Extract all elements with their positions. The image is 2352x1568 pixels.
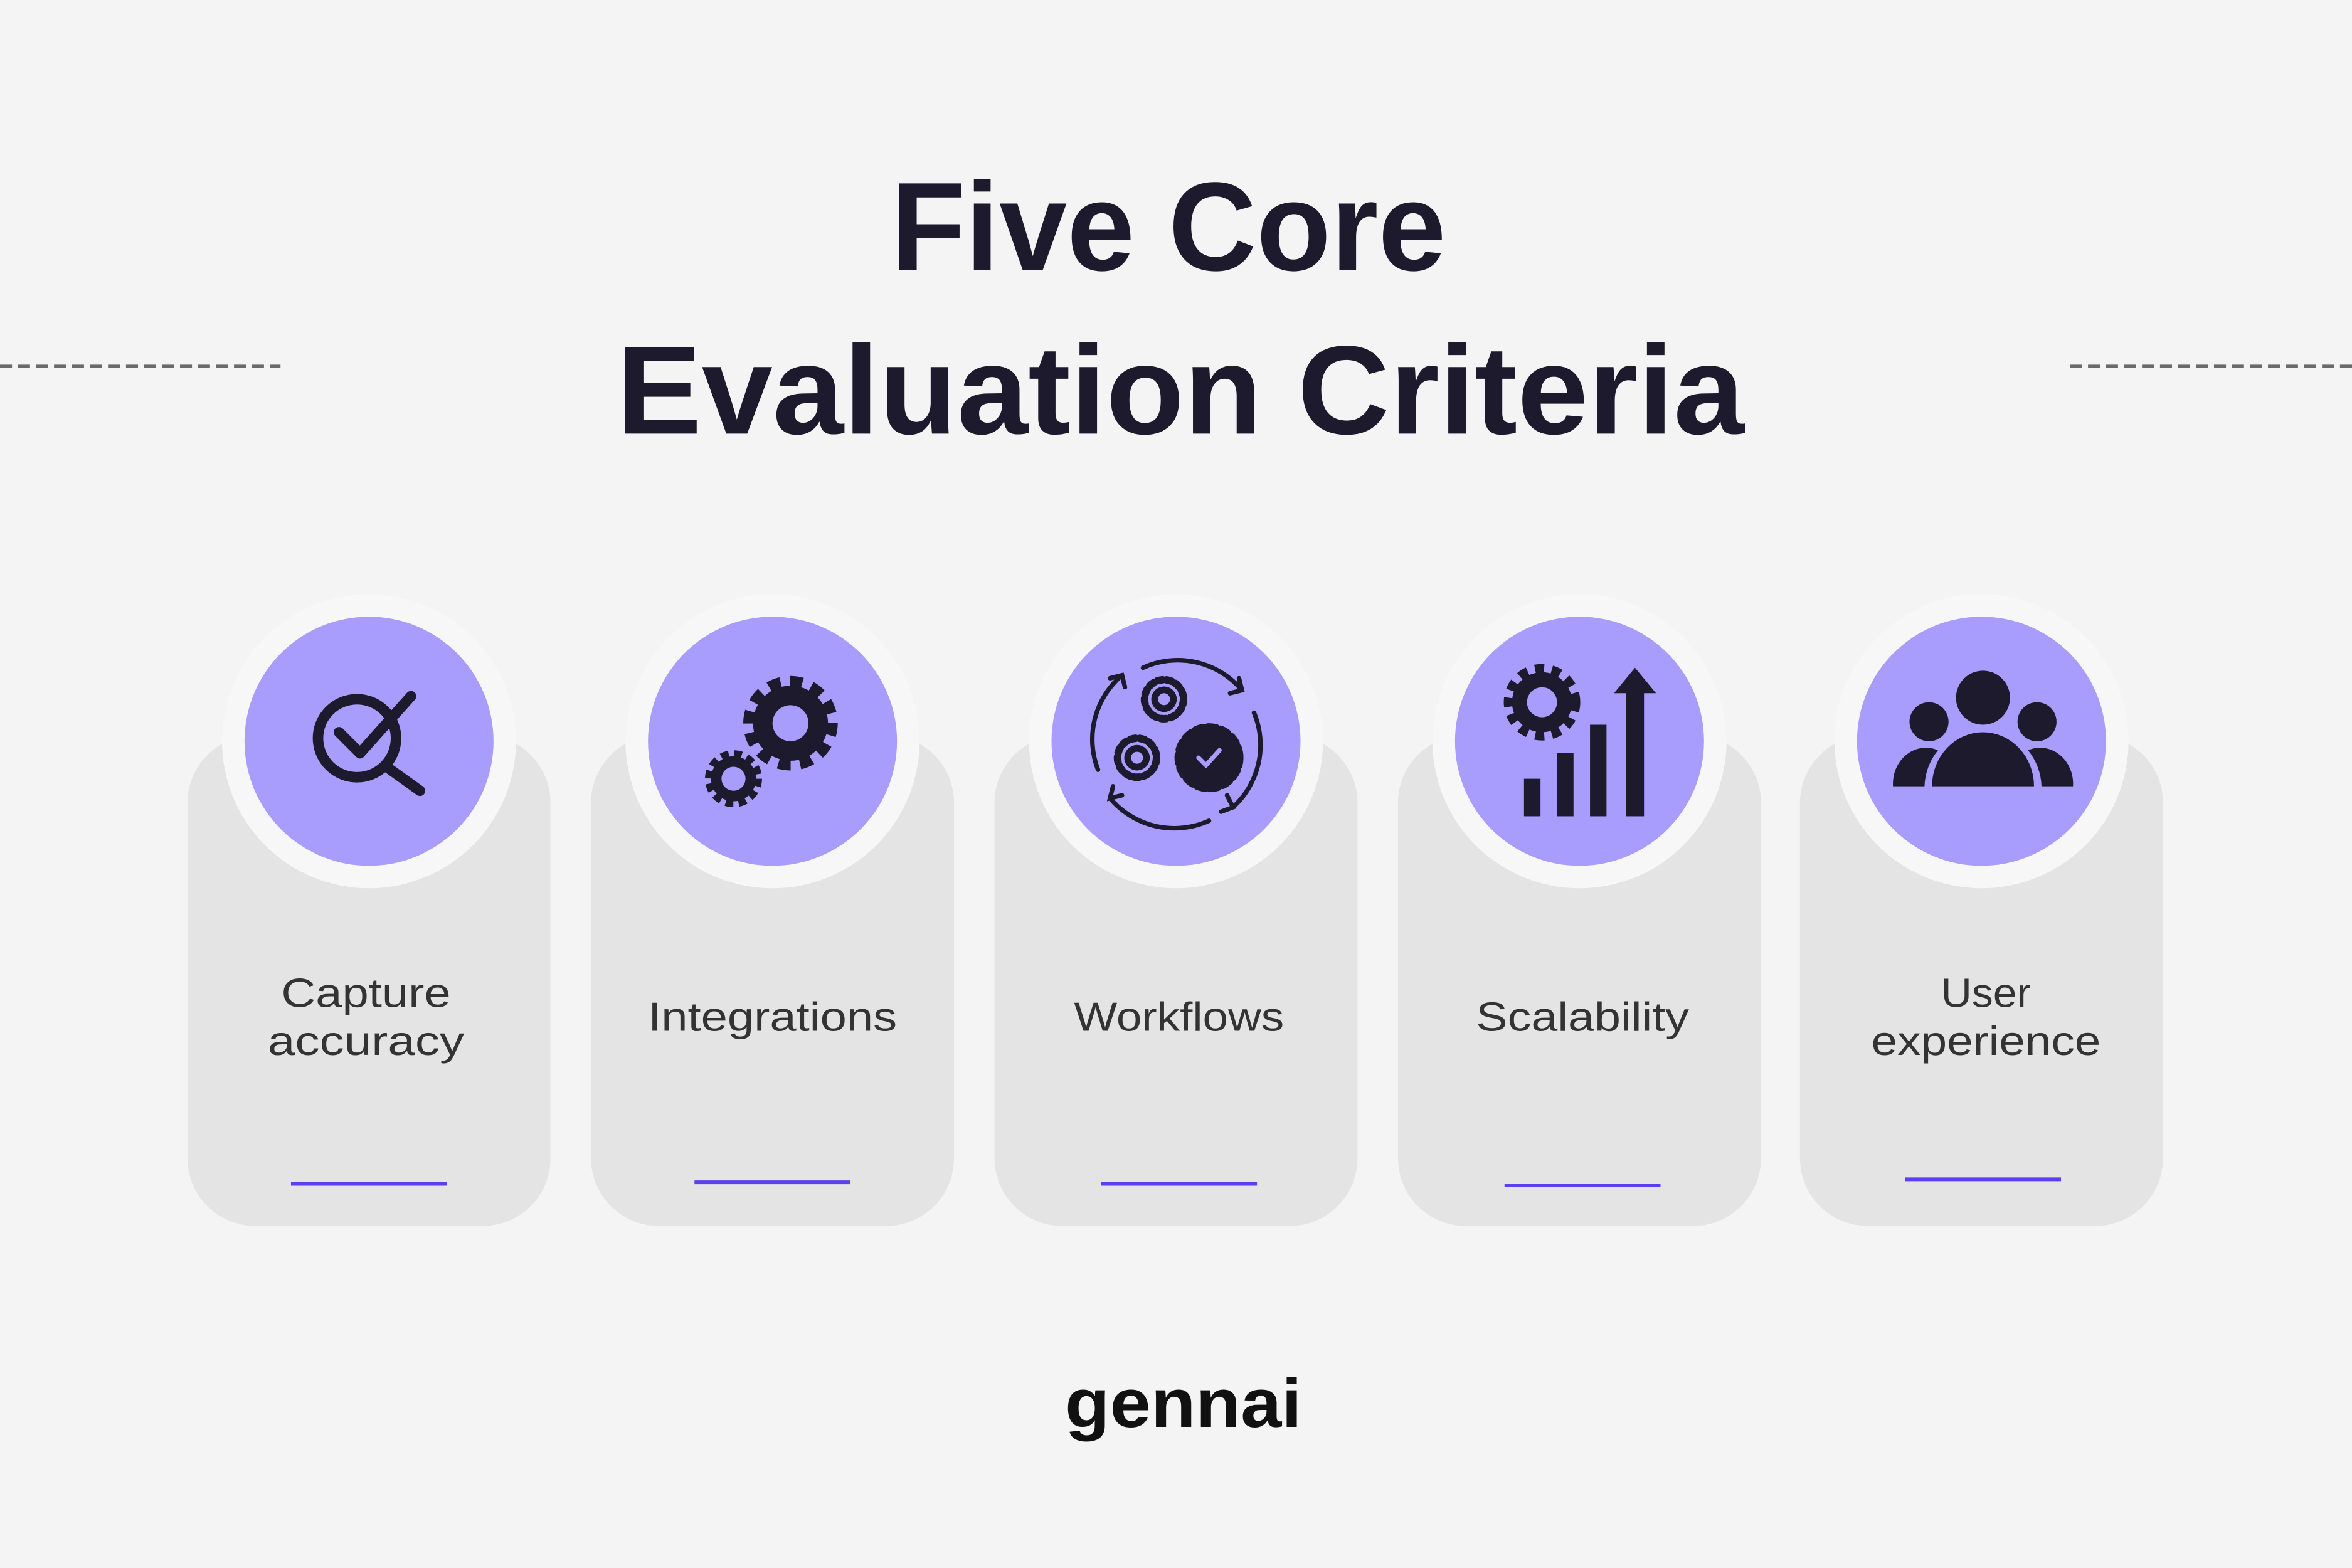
card: workflows: Workflows [1074, 995, 1284, 1040]
card: scalability: Scalability [1476, 995, 1690, 1040]
card: capture accuracy: accuracy [268, 1019, 465, 1064]
title [617, 156, 1746, 460]
card: user experience [1800, 594, 2163, 1226]
card: integrations [591, 594, 954, 1226]
title: Evaluation Criteria [617, 319, 1746, 460]
card: scalability [1398, 594, 1761, 1226]
title: Five Core [891, 156, 1446, 297]
card: user experience: User [1941, 970, 2031, 1015]
icon: magnifier check [318, 696, 420, 791]
card: workflows [995, 594, 1357, 1226]
label: Capture [281, 970, 451, 1015]
card: user experience: experience [1871, 1019, 2100, 1064]
logo: gennai [1065, 1365, 1302, 1442]
card: capture accuracy [188, 594, 551, 1226]
icon: workflow cycle [1093, 660, 1261, 829]
card: integrations: Integrations [648, 995, 897, 1040]
icon: gears [709, 683, 831, 803]
icon: users [1893, 670, 2073, 787]
icon: growth chart [1509, 668, 1656, 816]
